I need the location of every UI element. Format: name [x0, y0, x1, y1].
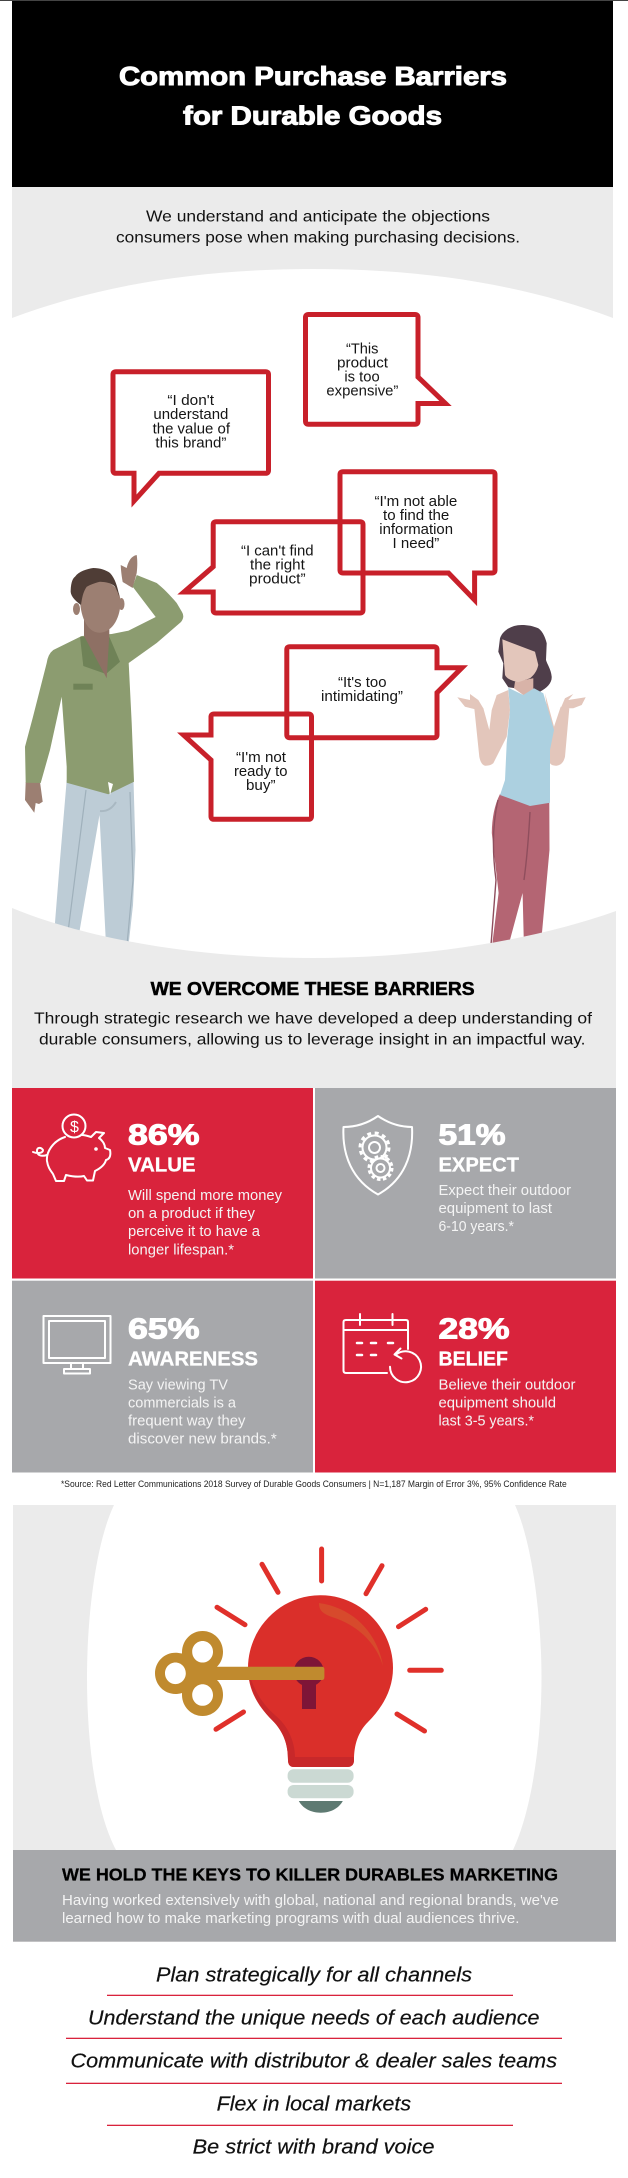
- stat card: belief 28%: [315, 1281, 616, 1472]
- panel: we overcome these barriers: [12, 908, 616, 1088]
- speech bubble: cannot find the right product: [184, 522, 363, 613]
- icon: piggy bank: $: [70, 1119, 79, 1136]
- stat card: expect 51%: Expect their outdoor: [438, 1182, 571, 1199]
- speech bubble: too intimidating: [287, 647, 462, 738]
- stat card: belief 28%: BELIEF: [438, 1348, 508, 1370]
- panel: keys to durables marketing: WE HOLD THE KEYS TO KILLER DURABLES MARKETING: [62, 1865, 558, 1885]
- stat card: value 86%: perceive it to have a: [128, 1223, 261, 1240]
- panel: keys to durables marketing: Having worked extensively with global, national and regional brands, we've: [62, 1892, 559, 1909]
- speech bubble: not ready to buy: ready to: [234, 764, 288, 780]
- stat card: expect 51%: equipment to last: [438, 1200, 553, 1217]
- speech bubble: do not understand the value: the value of: [153, 422, 231, 438]
- title banner: for Durable Goods: [183, 100, 442, 130]
- stat card: value 86%: VALUE: [128, 1154, 196, 1176]
- speech bubble: not able to find information: information: [379, 522, 453, 538]
- speech bubble: do not understand the value: this brand”: [155, 436, 227, 452]
- list: marketing principles: Flex in local markets: [217, 2094, 411, 2116]
- list: marketing principles: Plan strategically for all channels: [156, 1965, 472, 1987]
- figure: woman shrugging: [457, 625, 586, 948]
- speech bubble: not ready to buy: “I'm not: [236, 750, 286, 766]
- panel: lightbulb background: [13, 1505, 616, 1850]
- intro panel with curved top: consumers pose when making purchasing decisions.: [116, 230, 520, 246]
- stat card: expect 51%: 51%: [438, 1120, 506, 1152]
- speech bubble: this product is too expensive: [306, 314, 446, 424]
- list: marketing principles: [66, 1965, 562, 2158]
- speech bubble: do not understand the value: understand: [153, 407, 228, 423]
- intro panel with curved top: We understand and anticipate the objections: [146, 208, 490, 226]
- figure: man scratching his head: [25, 555, 183, 950]
- speech bubble: not able to find information: I need”: [392, 536, 439, 552]
- speech bubble: do not understand the value: “I don't: [167, 393, 214, 409]
- stat card: value 86%: [12, 1088, 313, 1278]
- stat card: expect 51%: [315, 1088, 616, 1278]
- light rays: [216, 1549, 441, 1731]
- speech bubble: not ready to buy: [184, 714, 312, 819]
- panel: we overcome these barriers: Through strategic research we have developed a deep understanding of: [34, 1011, 593, 1028]
- stat card: value 86%: longer lifespan.*: [128, 1241, 234, 1258]
- speech bubble: do not understand the value: [113, 372, 268, 501]
- icon: lightbulb with key: [155, 1549, 441, 1813]
- speech bubble: too intimidating: “It's too: [338, 675, 386, 691]
- speech bubble: this product is too expensive: is too: [344, 369, 380, 385]
- stat card: expect 51%: EXPECT: [438, 1154, 519, 1176]
- panel: we overcome these barriers: durable consumers, allowing us to leverage insight in an impactful way.: [39, 1032, 586, 1049]
- panel: keys to durables marketing: learned how to make marketing programs with dual audiences thrive.: [62, 1910, 519, 1927]
- stat card: awareness 65%: [12, 1281, 313, 1472]
- panel: we overcome these barriers: WE OVERCOME THESE BARRIERS: [151, 979, 475, 999]
- speech bubble: not able to find information: “I'm not able: [374, 494, 457, 510]
- speech bubble: too intimidating: intimidating”: [321, 689, 403, 705]
- intro panel with curved top: [12, 187, 613, 318]
- icon: television: [44, 1316, 110, 1374]
- stat card: awareness 65%: commercials is a: [128, 1394, 237, 1412]
- icon: piggy bank: [33, 1114, 110, 1181]
- stat card: value 86%: on a product if they: [128, 1205, 255, 1222]
- stat card: belief 28%: 28%: [438, 1314, 510, 1346]
- icon: calendar with refresh arrow: [344, 1314, 421, 1382]
- stat card: awareness 65%: frequent way they: [128, 1412, 246, 1429]
- speech bubble: cannot find the right product: the right: [250, 558, 305, 574]
- speech bubble: not able to find information: to find the: [383, 508, 449, 524]
- stat card: belief 28%: last 3-5 years.*: [438, 1412, 534, 1429]
- speech bubble: cannot find the right product: “I can't find: [241, 544, 314, 560]
- icon: shield with gears: [343, 1116, 412, 1194]
- speech bubble: this product is too expensive: product: [337, 355, 388, 371]
- stat card: expect 51%: 6-10 years.*: [438, 1218, 514, 1235]
- stat card: awareness 65%: Say viewing TV: [128, 1376, 228, 1393]
- stat card: awareness 65%: discover new brands.*: [128, 1431, 277, 1448]
- title banner: [12, 1, 613, 187]
- stat card: belief 28%: equipment should: [438, 1394, 556, 1412]
- list: marketing principles: Understand the unique needs of each audience: [88, 2008, 540, 2030]
- speech bubble: not able to find information: [340, 472, 495, 600]
- stat card: awareness 65%: 65%: [128, 1314, 200, 1346]
- stat card: value 86%: Will spend more money: [128, 1187, 282, 1204]
- list: marketing principles: Communicate with distributor & dealer sales teams: [70, 2051, 557, 2073]
- stat card: belief 28%: Believe their outdoor: [438, 1376, 576, 1393]
- panel: keys to durables marketing: [13, 1850, 616, 1942]
- title banner: Common Purchase Barriers: [119, 61, 507, 91]
- speech bubble: cannot find the right product: product”: [249, 572, 306, 588]
- list: marketing principles: Be strict with brand voice: [193, 2136, 434, 2158]
- speech bubble: this product is too expensive: expensive”: [326, 383, 399, 399]
- source footnote: *Source: Red Letter Communications 2018 Survey of Durable Goods Consumers | N=1,187 Margin of Error 3%, 95% Confidence Rate: [61, 1479, 567, 1490]
- stat card: awareness 65%: AWARENESS: [128, 1348, 258, 1370]
- speech bubble: this product is too expensive: “This: [346, 341, 378, 357]
- stat card: value 86%: 86%: [128, 1120, 200, 1152]
- speech bubble: not ready to buy: buy”: [246, 778, 276, 794]
